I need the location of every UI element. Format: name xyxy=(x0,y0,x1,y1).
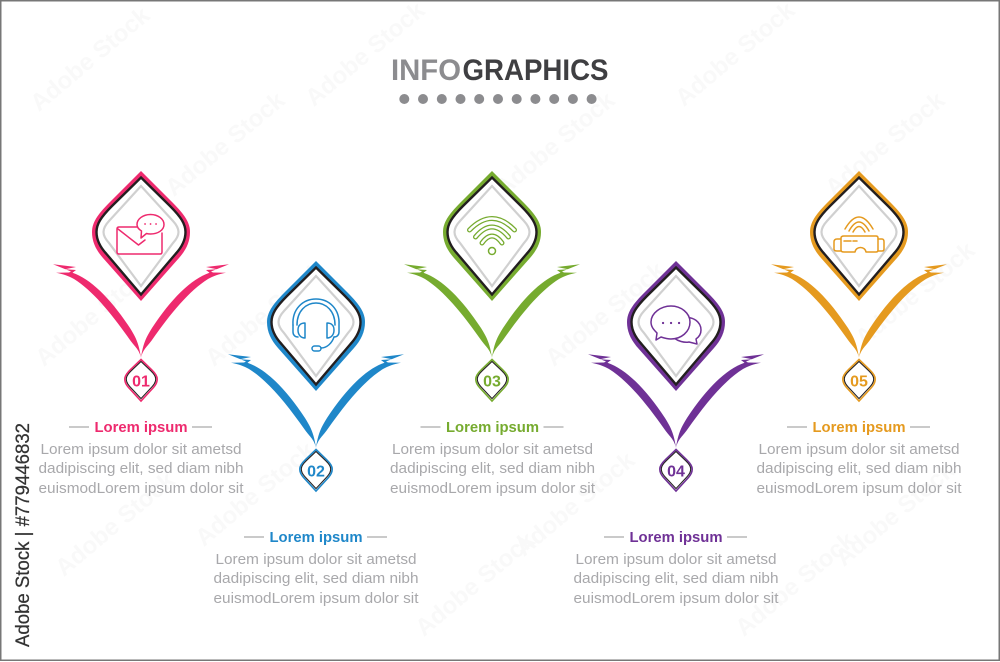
watermark pattern: Adobe Stock xyxy=(820,86,951,202)
icon: envelope with speech bubble xyxy=(117,214,164,254)
icon: headset xyxy=(293,299,339,351)
title xyxy=(391,54,608,87)
text block 01: euismodLorem ipsum dolor sit xyxy=(38,480,244,497)
title dots xyxy=(399,94,597,104)
text block 05: euismodLorem ipsum dolor sit xyxy=(756,480,962,497)
icon: wifi xyxy=(470,218,514,254)
step 05 graphic xyxy=(771,171,947,401)
title: GRAPHICS xyxy=(462,54,608,87)
watermark pattern: Adobe Stock xyxy=(30,256,161,372)
text block 05 xyxy=(756,419,962,497)
text block 04: Lorem ipsum dolor sit ametsd xyxy=(576,551,776,568)
watermark pattern: Adobe Stock xyxy=(160,86,291,202)
watermark pattern: Adobe Stock xyxy=(190,436,321,552)
text block 02 xyxy=(214,529,419,607)
step 03 graphic xyxy=(404,171,580,401)
icon: chat bubbles xyxy=(651,306,701,344)
step number 04: 04 xyxy=(667,464,685,480)
step number 02: 02 xyxy=(307,464,325,480)
text block 01: Lorem ipsum xyxy=(94,419,188,436)
step 01 graphic xyxy=(53,171,229,401)
text block 02: Lorem ipsum xyxy=(270,529,362,546)
step 02 graphic xyxy=(228,261,404,491)
watermark pattern: Adobe Stock xyxy=(410,526,541,642)
text block 03: dadipiscing elit, sed diam nibh xyxy=(390,460,595,477)
watermark pattern: Adobe Stock xyxy=(670,0,801,112)
text block 04 xyxy=(574,529,779,607)
watermark pattern: Adobe Stock xyxy=(540,256,671,372)
step number 05: 05 xyxy=(850,374,868,390)
text block 05: Lorem ipsum xyxy=(812,419,906,436)
step 04 graphic xyxy=(588,261,764,491)
icon: VR headset xyxy=(834,217,884,252)
text block 02: Lorem ipsum dolor sit ametsd xyxy=(216,551,416,568)
watermark pattern: Adobe Stock xyxy=(850,236,981,352)
text block 04: euismodLorem ipsum dolor sit xyxy=(573,590,779,607)
text block 03 xyxy=(390,419,596,497)
text block 01: Lorem ipsum dolor sit ametsd xyxy=(41,441,241,458)
text block 05: Lorem ipsum dolor sit ametsd xyxy=(759,441,959,458)
watermark pattern: Adobe Stock xyxy=(510,446,641,562)
text block 03: euismodLorem ipsum dolor sit xyxy=(390,480,596,497)
watermark pattern: Adobe Stock xyxy=(25,1,156,117)
watermark pattern: Adobe Stock xyxy=(730,526,861,642)
watermark pattern: Adobe Stock xyxy=(200,256,331,372)
watermark pattern: Adobe Stock xyxy=(50,466,181,582)
text block 01: dadipiscing elit, sed diam nibh xyxy=(38,460,244,477)
stock image id, vertical: Adobe Stock | #779446832 xyxy=(13,423,34,647)
text block 02: dadipiscing elit, sed diam nibh xyxy=(213,570,419,587)
text block 04: dadipiscing elit, sed diam nibh xyxy=(573,570,779,587)
text block 05: dadipiscing elit, sed diam nibh xyxy=(756,460,962,477)
watermark pattern: Adobe Stock xyxy=(490,86,621,202)
watermark pattern: Adobe Stock xyxy=(300,0,431,112)
text block 04: Lorem ipsum xyxy=(630,529,722,546)
title: INFO xyxy=(391,54,461,87)
text block 01 xyxy=(38,419,244,497)
text block 03: Lorem ipsum dolor sit ametsd xyxy=(392,441,593,458)
step number 03: 03 xyxy=(483,374,501,390)
text block 03: Lorem ipsum xyxy=(446,419,539,436)
text block 02: euismodLorem ipsum dolor sit xyxy=(213,590,419,607)
step number 01: 01 xyxy=(132,374,150,390)
watermark pattern: Adobe Stock xyxy=(830,456,961,572)
